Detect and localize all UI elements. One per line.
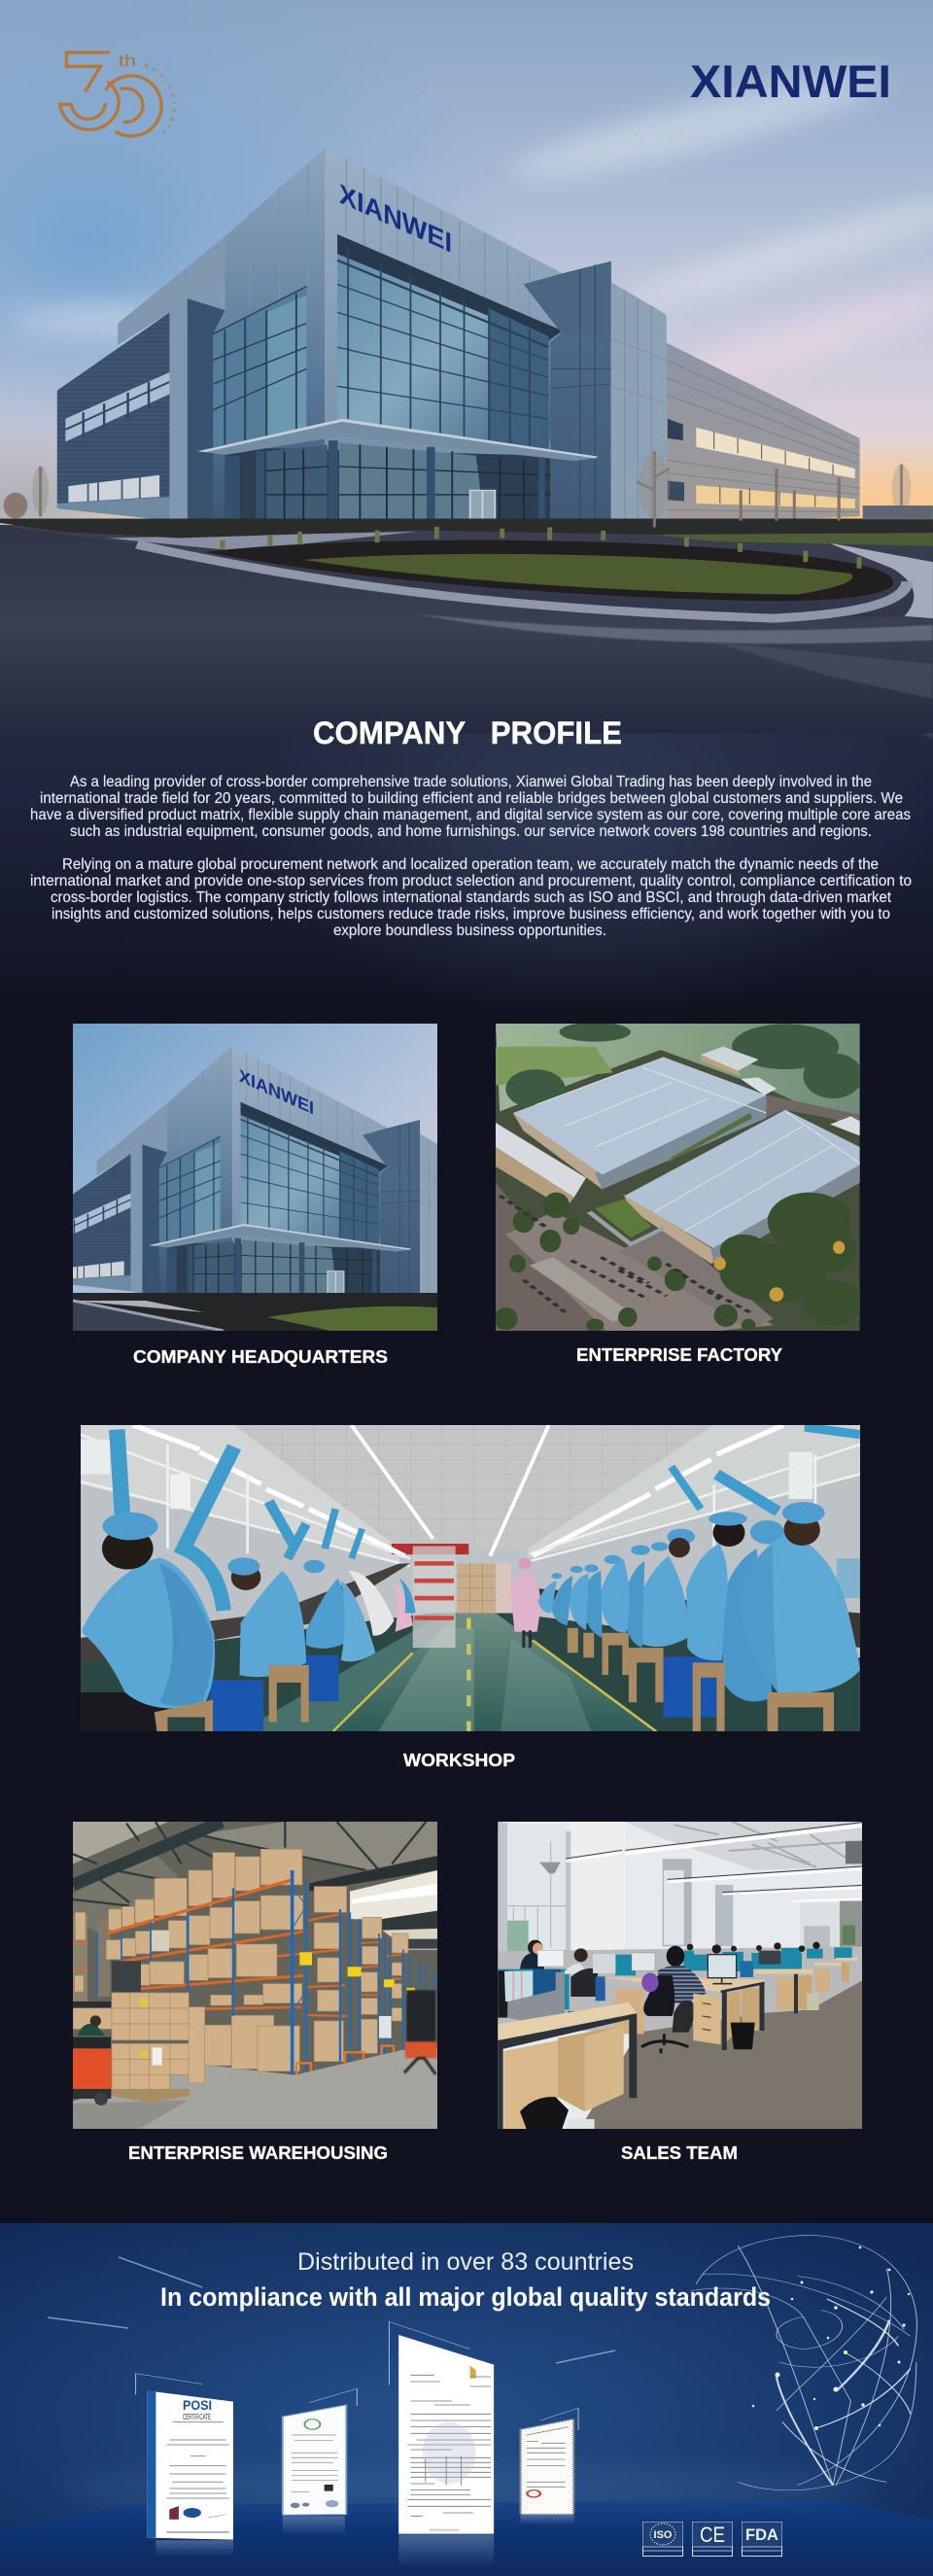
graphic: wireframe globe <box>690 2236 916 2490</box>
hero building <box>57 148 860 526</box>
photo: enterprise warehousing <box>73 1822 437 2129</box>
logo: XIANWEI: XIANWEI <box>690 55 891 107</box>
logo: 30th label: th <box>119 52 136 70</box>
label: enterprise warehousing: ENTERPRISE WAREHOUSING <box>128 2142 388 2163</box>
hero background: sky and road <box>0 0 933 1021</box>
badge: FDA <box>743 2522 781 2557</box>
label: enterprise factory: ENTERPRISE FACTORY <box>576 1344 783 1365</box>
photo: enterprise factory aerial <box>494 1023 863 1332</box>
photo: sales team office <box>498 1822 862 2129</box>
hero road reflections <box>0 525 933 733</box>
certificate: POSI title: POSI <box>183 2397 212 2413</box>
text block: introduction paragraphs: As a leading provider of cross-border comprehensive trade solutions, Xianwei Global Trading has been deeply involved in the <box>70 774 872 790</box>
photo: workshop <box>81 1425 860 1732</box>
label: company headquarters: COMPANY HEADQUARTERS <box>133 1346 388 1367</box>
text block: introduction paragraphs: cross-border logistics. The company strictly follows international standards such as ISO and BSCI, and through data-driven market <box>51 889 892 906</box>
text block: introduction paragraphs: Relying on a mature global procurement network and localized operation team, we accurately match the dynamic needs of the <box>62 856 879 873</box>
logo: anniversary arc text: Anniversary <box>143 62 177 135</box>
certificate: POSI <box>136 2374 357 2540</box>
certificate: POSI subtitle: CERTIFICATE <box>183 2413 211 2421</box>
certificate: second <box>283 2405 346 2515</box>
logo: 30th anniversary <box>60 52 161 136</box>
headquarters building sign: XIANWEI <box>239 1066 314 1119</box>
heading: company profile: COMPANY PROFILE <box>313 715 622 750</box>
badge: CE: CE <box>700 2523 725 2547</box>
label: sales team: SALES TEAM <box>621 2142 738 2163</box>
text block: introduction paragraphs: insights and customized solutions, helps customers reduce trade risks, improve business efficiency, and work together with you to <box>52 906 890 922</box>
certificate: fourth <box>521 2408 578 2515</box>
hero landscaping island <box>0 451 933 618</box>
building sign: XIANWEI <box>339 178 452 260</box>
badge: FDA: FDA <box>745 2525 778 2544</box>
text block: introduction paragraphs: such as industrial equipment, consumer goods, and home furnishings. our service network covers 198 countries and regions. <box>70 823 872 840</box>
graphic: globe dots <box>752 2246 910 2430</box>
certificate: third <box>389 2321 494 2534</box>
badge: ISO <box>643 2522 682 2557</box>
badge: ISO: ISO <box>654 2529 673 2541</box>
text block: introduction paragraphs <box>30 774 912 939</box>
heading: quality standards: In compliance with all major global quality standards <box>160 2282 771 2312</box>
certificate reflections <box>156 2515 574 2567</box>
label: workshop: WORKSHOP <box>403 1750 515 1770</box>
text block: introduction paragraphs: international trade field for 20 years, committed to building efficient and reliable bridges between global customers and suppliers. We <box>40 790 903 807</box>
photo: company headquarters <box>73 1024 437 1331</box>
banner: certifications background <box>0 2223 933 2576</box>
text block: introduction paragraphs: international market and provide one-stop services from product selection and procurement, quality control, compliance certification to <box>30 873 912 889</box>
text block: introduction paragraphs: explore boundless business opportunities. <box>333 922 606 939</box>
badge: CE <box>692 2522 733 2557</box>
heading: distributed in over 83 countries: Distributed in over 83 countries <box>297 2248 634 2276</box>
